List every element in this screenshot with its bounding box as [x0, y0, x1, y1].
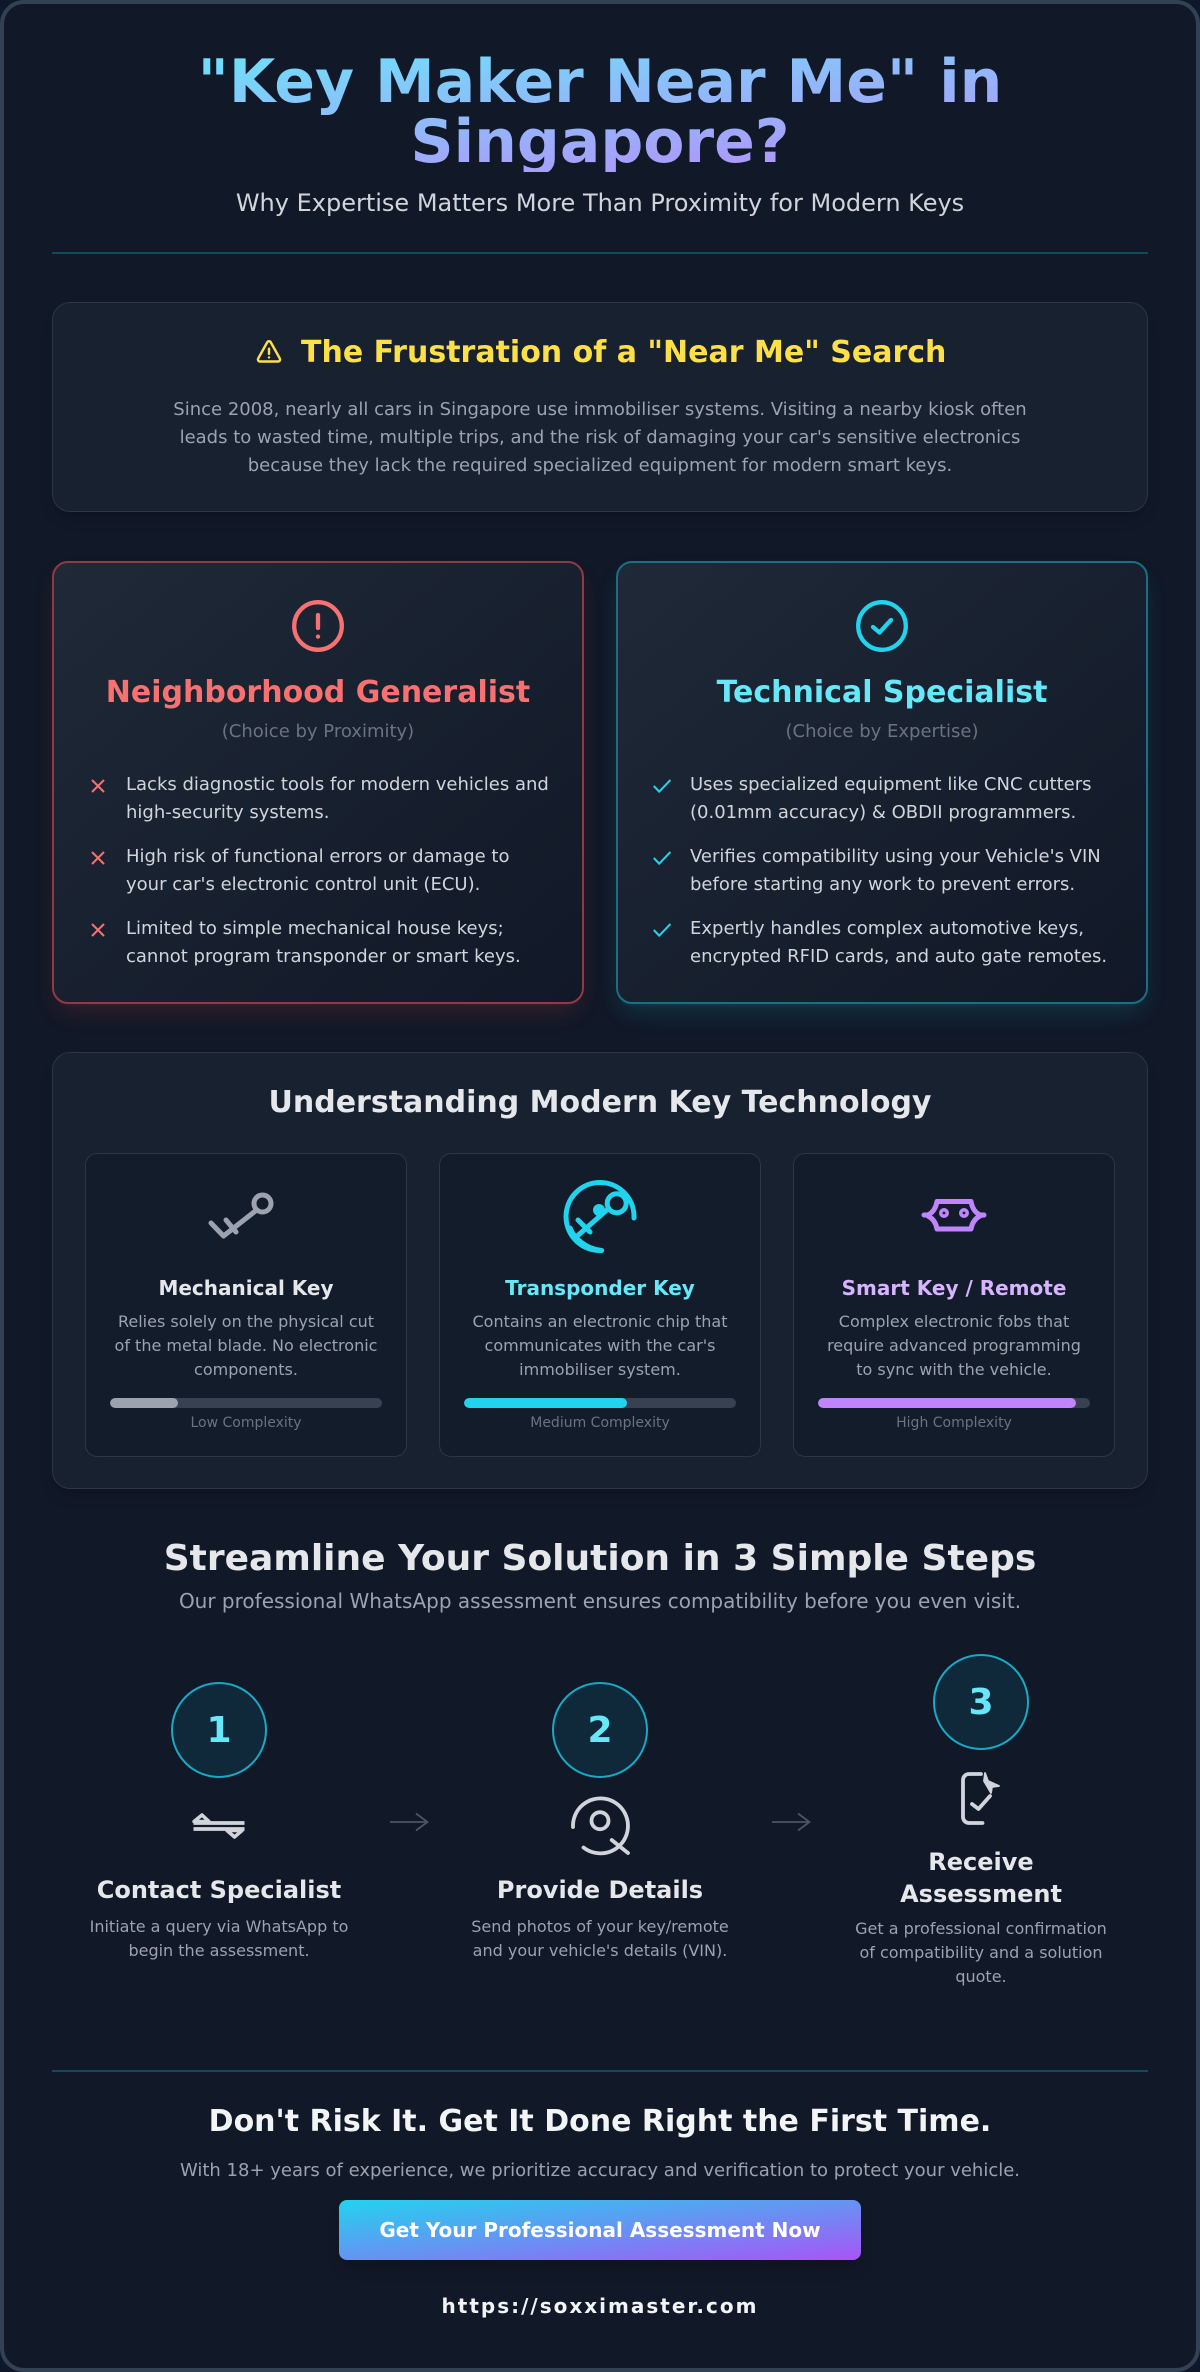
icon: check 3: [653, 923, 671, 937]
heading: Streamline Your Solution in 3 Simple Steps: [164, 1538, 1036, 1579]
list item 3: [690, 918, 1107, 967]
card description: Complex electronic fobs that: [839, 1312, 1069, 1331]
card description: [115, 1312, 377, 1379]
step description: begin the assessment.: [128, 1941, 310, 1960]
heading: Neighborhood Generalist: [106, 675, 530, 710]
step number 3: [933, 1654, 1029, 1750]
icon: cross 3: [91, 923, 105, 937]
section heading: Understanding Modern Key Technology: [268, 1085, 931, 1120]
panel: technical specialist: [614, 561, 1150, 1018]
panel: understanding modern key technology: [52, 1052, 1148, 1489]
step description: Initiate a query via WhatsApp to: [90, 1917, 348, 1936]
panel: neighborhood generalist: [49, 561, 587, 1019]
CTA button: [339, 2200, 861, 2260]
list item 1: high-security systems.: [126, 802, 330, 823]
CTA heading: Don't Risk It. Get It Done Right the First Time.: [209, 2104, 991, 2139]
step description: [90, 1917, 348, 1960]
step title: [841, 1846, 1121, 1910]
card description: components.: [194, 1360, 298, 1379]
step description: Get a professional confirmation: [855, 1919, 1107, 1938]
arrow: step 2 to step 3: [770, 1810, 812, 1834]
card description: communicates with the car's: [485, 1336, 715, 1355]
list item 3: encrypted RFID cards, and auto gate remotes.: [690, 946, 1107, 967]
card description: Relies solely on the physical cut: [118, 1312, 374, 1331]
list item 3: [126, 918, 521, 967]
card description: [472, 1312, 728, 1379]
list item 2: your car's electronic control unit (ECU).: [126, 874, 480, 895]
step description: [841, 1917, 1121, 1989]
complexity bar: 25%: [110, 1398, 382, 1408]
card: mechanical key: [85, 1153, 407, 1457]
panel body text: because they lack the required specialized equipment for modern smart keys.: [248, 455, 952, 476]
card description: immobiliser system.: [519, 1360, 681, 1379]
step 1: [90, 1682, 348, 1960]
step number 2: [552, 1682, 648, 1778]
card description: [827, 1312, 1081, 1379]
CTA text: With 18+ years of experience, we prioritize accuracy and verification to protect your vehicle.: [180, 2160, 1020, 2181]
step title: Assessment: [900, 1880, 1062, 1908]
section heading: three steps: [164, 1538, 1036, 1613]
step number 3: 3: [968, 1682, 994, 1722]
list item 3: Expertly handles complex automotive keys,: [690, 918, 1084, 939]
subheading: (Choice by Proximity): [222, 721, 414, 742]
list item 2: [126, 846, 510, 895]
step 2: [471, 1682, 729, 1960]
list item 3: cannot program transponder or smart keys.: [126, 946, 521, 967]
icon: magnifier scan: [571, 1796, 630, 1856]
card: transponder key: [439, 1153, 761, 1457]
icon: cross 2: [91, 851, 105, 865]
icon: smart key fob: [922, 1199, 986, 1232]
header: [198, 47, 1002, 217]
step description: [471, 1917, 729, 1960]
subtitle: Why Expertise Matters More Than Proximity for Modern Keys: [236, 189, 964, 217]
card description: to sync with the vehicle.: [856, 1360, 1052, 1379]
panel body text: leads to wasted time, multiple trips, and the risk of damaging your car's sensitive electronics: [180, 427, 1020, 448]
card description: Contains an electronic chip that: [472, 1312, 728, 1331]
icon: transponder key: [564, 1180, 637, 1253]
step title: Receive: [928, 1848, 1034, 1876]
step number 1: [171, 1682, 267, 1778]
step title: Contact Specialist: [97, 1876, 341, 1904]
heading: Technical Specialist: [717, 675, 1047, 710]
list item 2: Verifies compatibility using your Vehicle's VIN: [690, 846, 1101, 867]
icon: check 2: [653, 851, 671, 865]
list item 1: [690, 774, 1092, 823]
website URL: https://soxximaster.com: [442, 2294, 758, 2318]
list item 2: [690, 846, 1101, 895]
list item 1: [126, 774, 549, 823]
icon: exclamation circle: [292, 600, 344, 652]
card title: Smart Key / Remote: [842, 1276, 1066, 1300]
step description: and your vehicle's details (VIN).: [473, 1941, 727, 1960]
subheading: (Choice by Expertise): [786, 721, 978, 742]
step number 2: 2: [587, 1710, 613, 1750]
CTA button: Get Your Professional Assessment Now: [379, 2218, 821, 2242]
title: Singapore?: [410, 107, 790, 177]
list item 1: (0.01mm accuracy) & OBDII programmers.: [690, 802, 1076, 823]
icon: phone with check: [956, 1768, 1006, 1826]
call to action: [52, 2090, 1148, 2330]
title: [52, 52, 1148, 172]
list: generalist drawbacks: [91, 774, 549, 967]
arrow: step 1 to step 2: [390, 1812, 429, 1832]
list: specialist benefits: [653, 774, 1107, 967]
title: "Key Maker Near Me" in: [198, 47, 1002, 117]
list item 3: Limited to simple mechanical house keys;: [126, 918, 504, 939]
panel body text: Since 2008, nearly all cars in Singapore use immobiliser systems. Visiting a nearby kiosk often: [173, 399, 1027, 420]
card description: of the metal blade. No electronic: [115, 1336, 377, 1355]
list item 1: Uses specialized equipment like CNC cutters: [690, 774, 1092, 795]
step description: quote.: [955, 1967, 1007, 1986]
card title: Transponder Key: [505, 1276, 695, 1300]
complexity label: High Complexity: [896, 1415, 1012, 1431]
icon: check 1: [653, 779, 671, 793]
complexity bar: 60%: [464, 1398, 736, 1408]
icon: contact arrows: [192, 1813, 244, 1839]
icon: cross 1: [91, 779, 105, 793]
step 3: [841, 1650, 1121, 1990]
complexity label: Medium Complexity: [530, 1415, 670, 1431]
list item 1: Lacks diagnostic tools for modern vehicles and: [126, 774, 549, 795]
panel: frustration of near me search: [52, 302, 1148, 512]
complexity label: Low Complexity: [190, 1415, 302, 1431]
list item 2: High risk of functional errors or damage to: [126, 846, 510, 867]
icon: mechanical key: [208, 1192, 274, 1239]
complexity bar: 95%: [818, 1398, 1090, 1408]
card: smart key / remote: [793, 1153, 1115, 1457]
icon: check circle: [856, 600, 908, 652]
subheading: Our professional WhatsApp assessment ensures compatibility before you even visit.: [179, 1589, 1021, 1613]
card description: require advanced programming: [827, 1336, 1081, 1355]
list item 2: before starting any work to prevent errors.: [690, 874, 1075, 895]
icon: warning triangle: [256, 340, 282, 363]
card title: Mechanical Key: [158, 1276, 334, 1300]
step description: of compatibility and a solution: [859, 1943, 1103, 1962]
panel body text: [173, 399, 1027, 476]
step description: Send photos of your key/remote: [471, 1917, 729, 1936]
step number 1: 1: [206, 1710, 232, 1750]
panel heading: The Frustration of a "Near Me" Search: [301, 335, 946, 370]
step title: Provide Details: [497, 1876, 703, 1904]
